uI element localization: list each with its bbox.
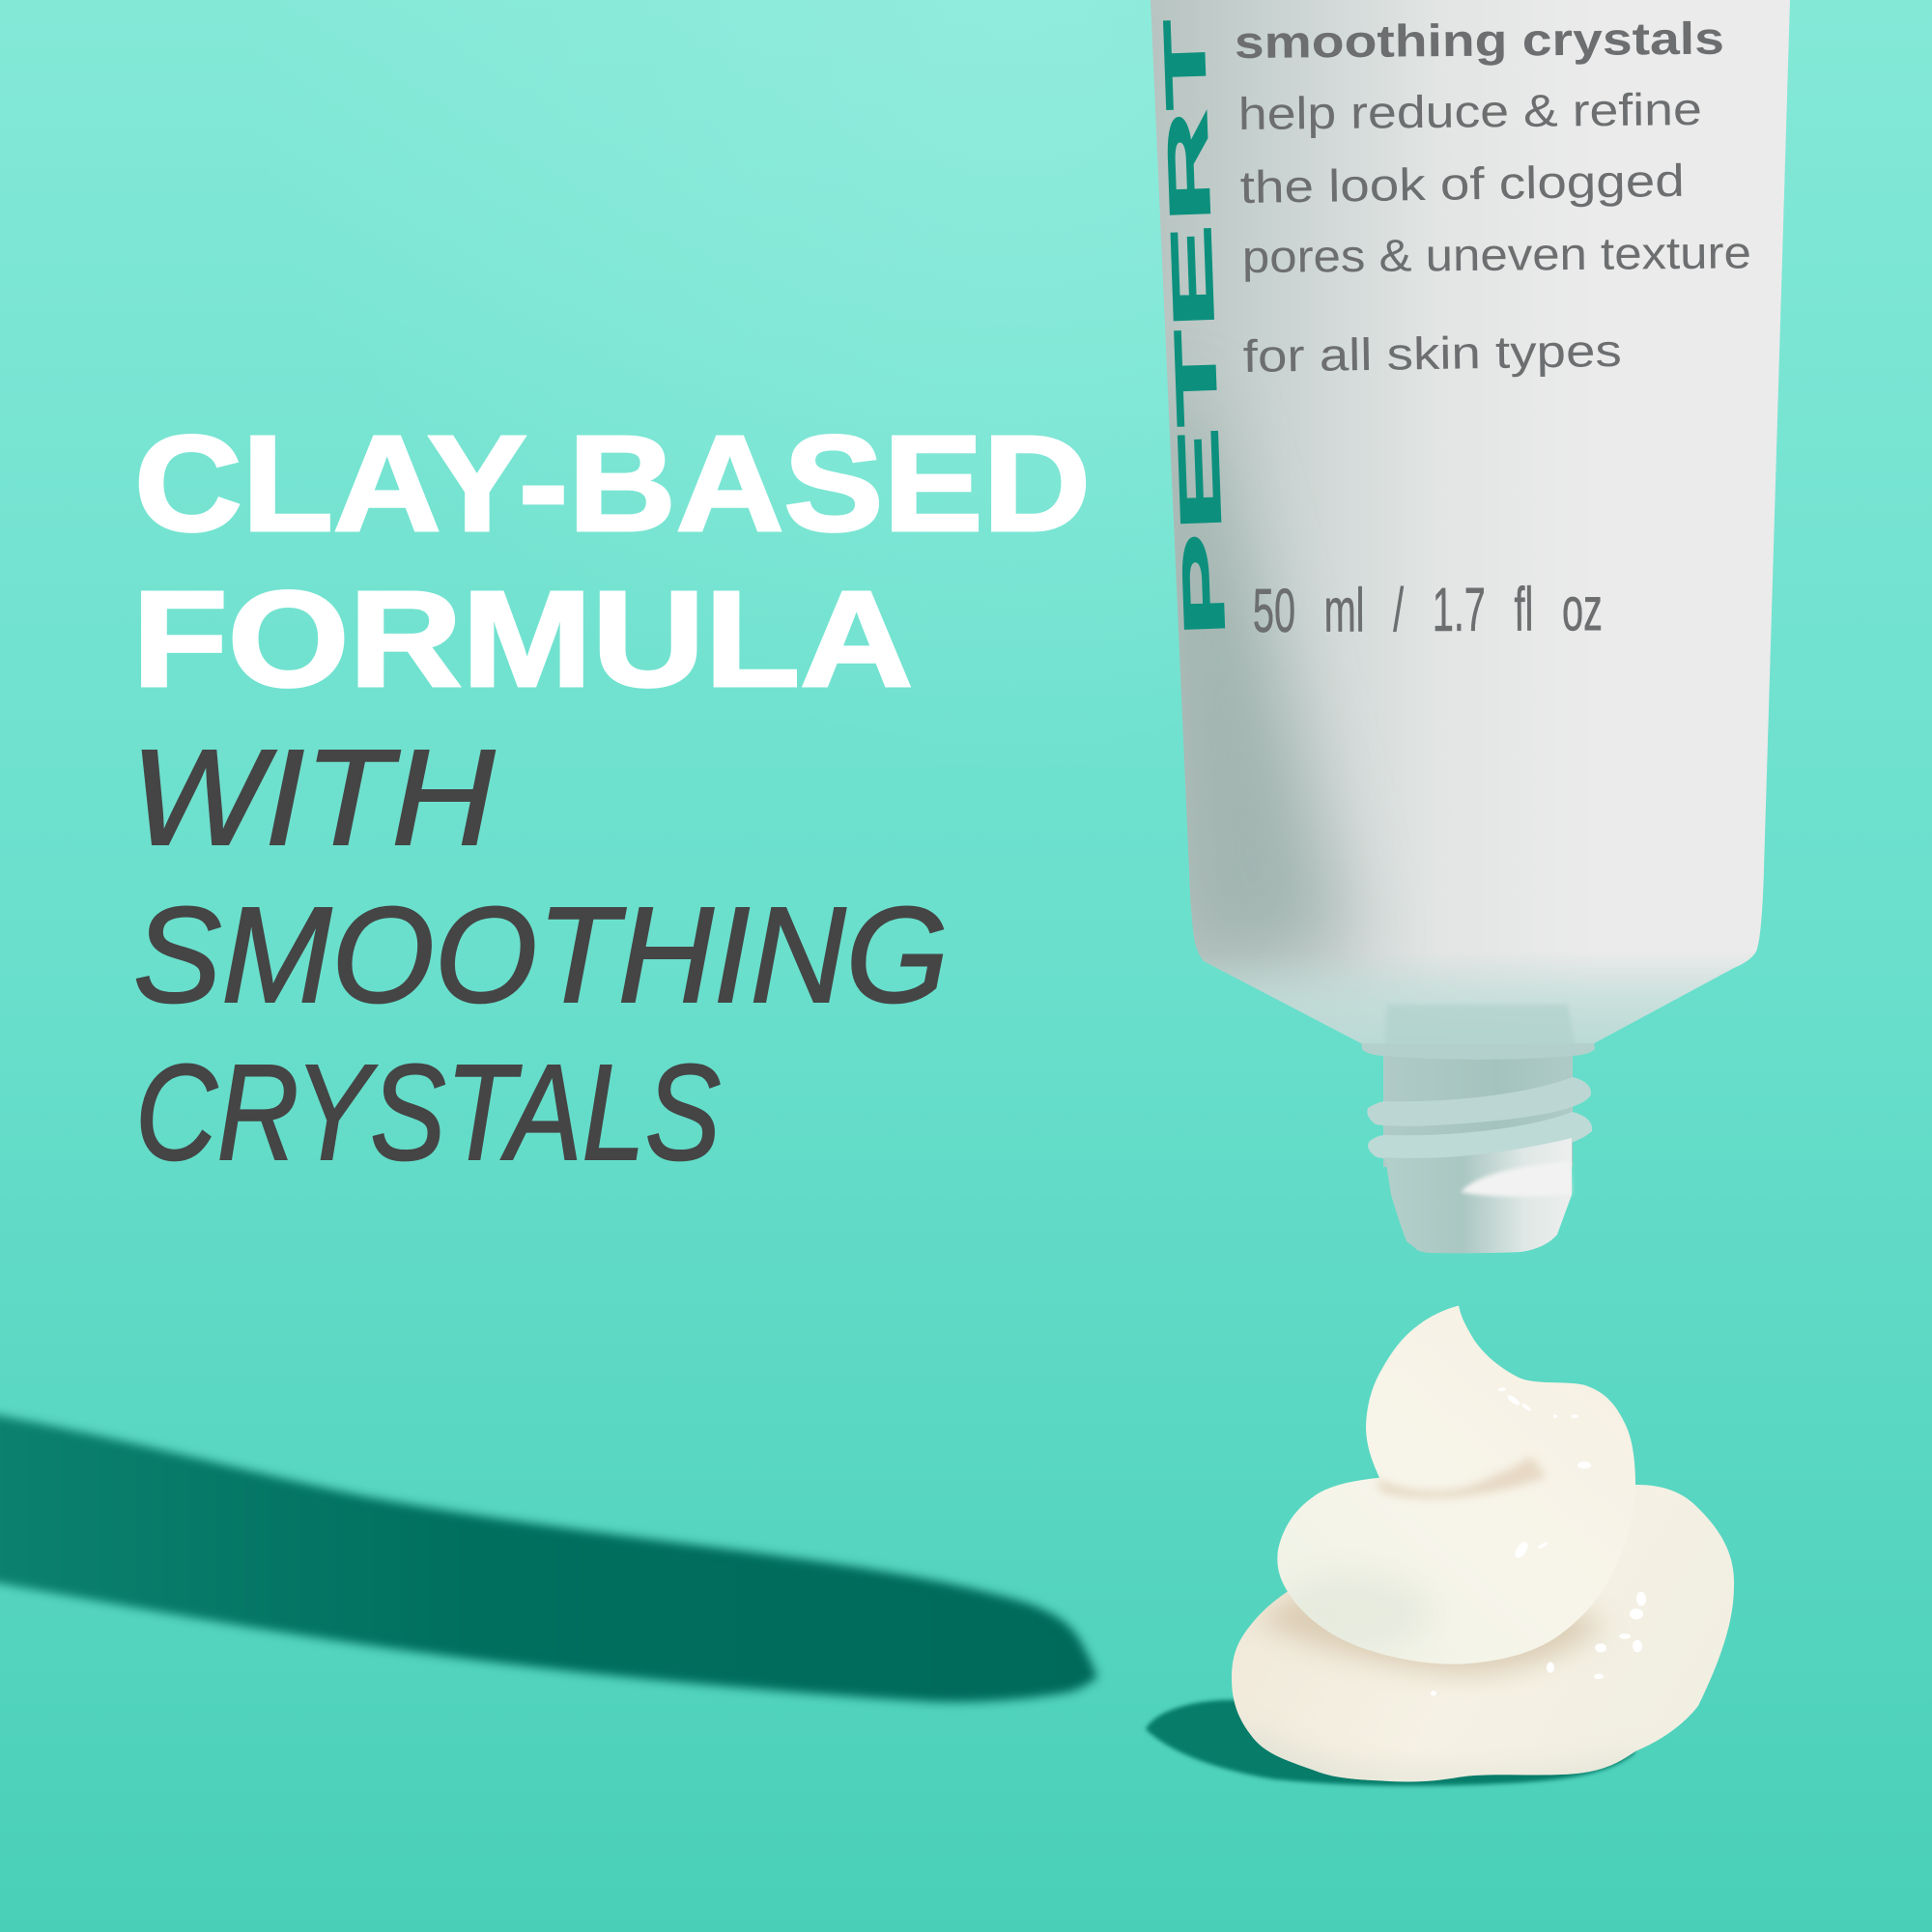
cream middle and top layers <box>1275 1306 1646 1696</box>
tube body <box>1140 0 1806 1053</box>
tube brand name: T <box>1151 18 1219 111</box>
heading: clay-based formula: FORMULA <box>132 562 913 715</box>
tube label text: help reduce & refine <box>1238 83 1702 139</box>
cream contact shadow <box>1146 1700 1634 1786</box>
heading: clay-based formula <box>132 407 1091 715</box>
product tube <box>1140 0 1806 1253</box>
tube label text: smoothing crystals <box>1235 13 1724 68</box>
heading: with smoothing crystals: SMOOTHING <box>133 878 949 1031</box>
heading: clay-based formula: CLAY-BASED <box>134 407 1091 559</box>
tube label text: the look of clogged <box>1239 155 1685 213</box>
cream swirl <box>1232 1306 1734 1791</box>
tube label text: pores & uneven texture <box>1242 226 1751 282</box>
tube label text <box>1235 13 1751 645</box>
heading: with smoothing crystals <box>130 721 949 1188</box>
tube label text: 50 ml / 1.7 fl oz <box>1253 576 1603 645</box>
tube label text: for all skin types <box>1242 325 1622 382</box>
tube nozzle <box>1361 1041 1595 1253</box>
heading: with smoothing crystals: CRYSTALS <box>135 1036 721 1188</box>
cream highlights <box>1431 1388 1646 1696</box>
cream base layer <box>1232 1485 1734 1791</box>
tube cast shadow <box>0 1408 1097 1702</box>
tube brand name: PETER <box>1154 108 1237 639</box>
heading: with smoothing crystals: WITH <box>130 721 495 873</box>
